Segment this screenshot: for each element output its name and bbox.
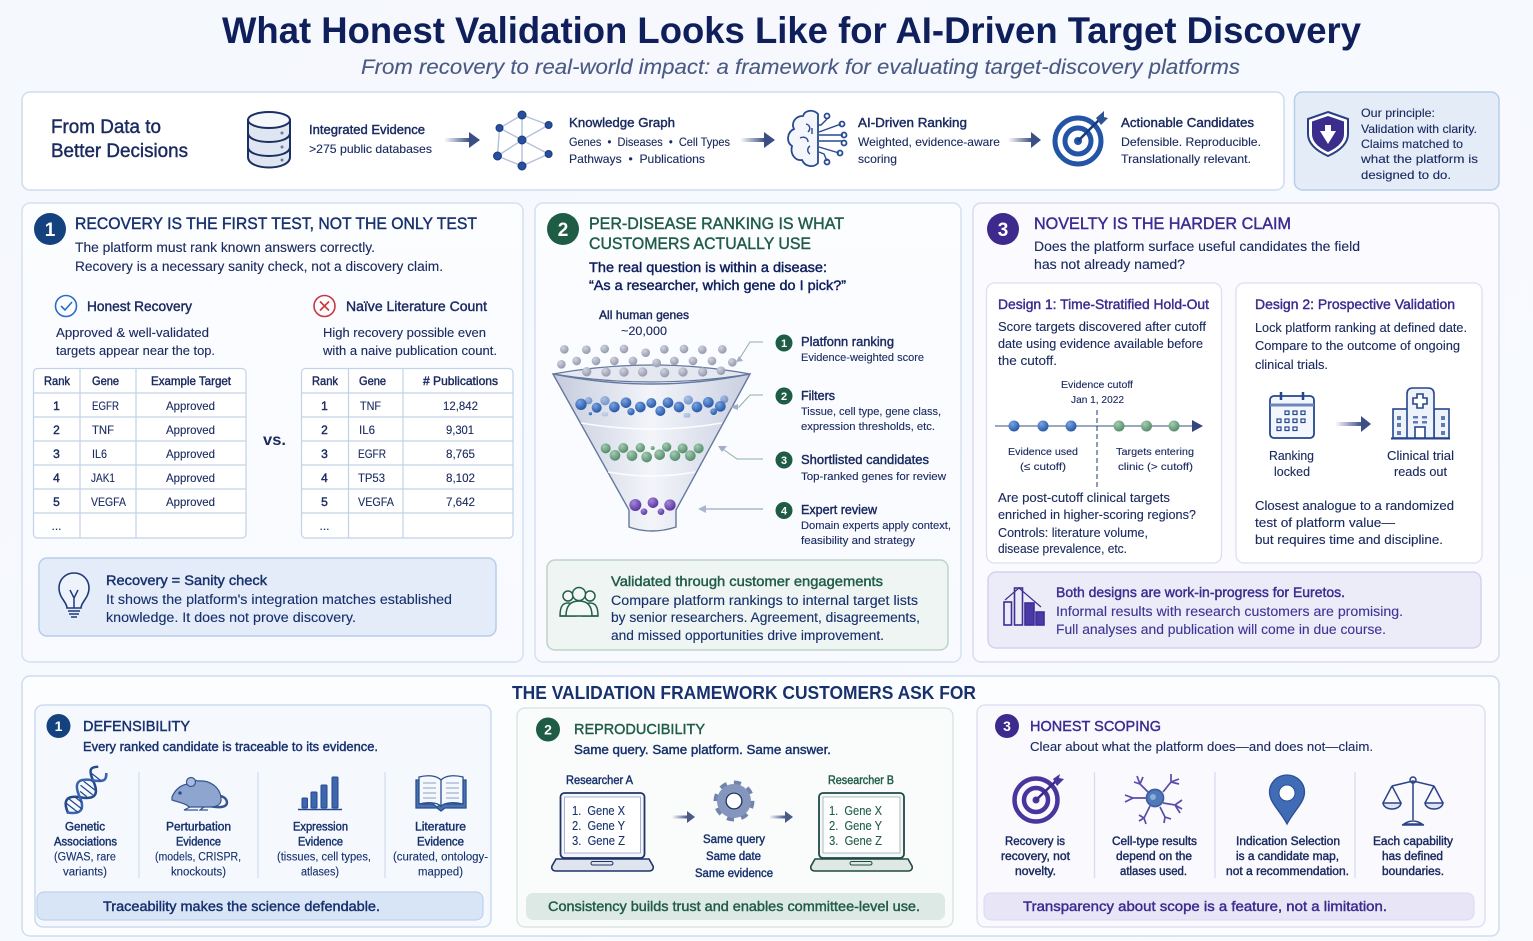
table: naive literature count: 8,102 [446,471,475,485]
label: vs: vs. [263,432,286,449]
title: What Honest Validation Looks Like for AI-Driven Target Discovery [222,10,1361,51]
arrow [740,132,775,148]
step 4: expert review [776,502,951,547]
table: naive literature count: ... [319,519,330,533]
table: honest recovery: EGFR [92,399,119,413]
labels: evidence types: Perturbation [166,822,231,834]
text: design 1 question: Controls: literature volume, [998,526,1148,540]
table: honest recovery: IL6 [92,447,107,461]
text: customer engagements: by senior researchers. Agreement, disagreements, [611,610,920,625]
arrow [769,811,793,823]
text: novelty intro: Does the platform surface useful candidates the field [1034,239,1360,254]
timeline [995,379,1203,488]
text: recovery intro: Recovery is a necessary sanity check, not a discovery claim. [75,259,443,274]
labels: evidence types: mapped) [418,866,463,878]
icon: mouse [172,778,227,810]
step 4: expert review: Expert review [801,502,878,517]
arrow [672,811,695,823]
footer banner [37,892,483,920]
table: honest recovery: Approved [166,447,215,461]
text: honest recovery: targets appear near the top. [56,343,215,358]
text: customer engagements [611,573,920,643]
text: design 2 description [1255,321,1467,372]
table: honest recovery: Approved [166,399,215,413]
labels: evidence types: variants) [63,866,107,878]
heading: defensibility: DEFENSIBILITY [83,718,190,735]
text: design 1 description: date using evidence available before [998,337,1203,351]
heading: defensibility: Every ranked candidate is traceable to its evidence. [83,739,378,754]
text: design 1 question: disease prevalence, etc. [998,542,1127,556]
funnel dots: filtered [575,395,728,418]
funnel dots: expert review [629,497,676,515]
table: honest recovery: Example Target [151,374,232,388]
footer banner [984,893,1474,920]
icon: target purple [1014,774,1064,822]
text: design 1 description: Score targets discovered after cutoff [998,320,1207,334]
icon: database [248,112,290,168]
table: honest recovery [34,368,246,538]
text: design 1 description [998,320,1207,368]
heading: reproducibility [574,721,831,757]
footer banner: Consistency builds trust and enables committee-level use. [548,898,920,914]
labels: evidence types: Evidence [176,836,221,848]
badge 2 [536,718,560,742]
text: design 2 description: Lock platform ranking at defined date. [1255,321,1467,335]
table: naive literature count: # Publications [423,374,498,388]
icon: gear [716,784,752,818]
heading: from data to better decisions [51,117,188,162]
text: customer engagements: Compare platform rankings to internal target lists [611,593,918,608]
text: our principle: what the platform is [1360,152,1478,166]
callout: customer engagements [547,560,948,650]
timeline: Jan 1, 2022 [1071,394,1124,406]
text: sanity check: It shows the platform's integration matches established [106,592,452,607]
table: honest recovery: ... [51,519,62,533]
timeline: Targets entering [1116,446,1194,458]
icon: hospital [1391,388,1450,438]
card: design 1 [986,283,1222,563]
labels: evidence types: (tissues, cell types, [277,852,371,864]
labels: scoping statements [1001,836,1453,878]
text: design 2 description: clinical trials. [1255,358,1328,372]
table: honest recovery: 3 [53,447,60,461]
text: design 2 conclusion [1255,499,1454,547]
panel: novelty [973,203,1499,662]
laptop: researcher A: 1. Gene X [572,804,626,818]
labels: scoping statements: not a recommendation. [1226,866,1349,878]
heading: per-disease ranking: PER-DISEASE RANKING IS WHAT [589,214,844,233]
table: naive literature count: 4 [321,471,328,485]
text: design 1 question: enriched in higher-scoring regions? [998,508,1196,522]
step 3: shortlisted candidates: Shortlisted candidates [801,452,929,467]
table: naive literature count: 2 [321,423,328,437]
step 1: platform ranking: Evidence-weighted score [801,352,924,364]
heading: per-disease ranking: CUSTOMERS ACTUALLY USE [589,234,811,253]
text: customer engagements: and missed opportunities drive improvement. [611,628,884,643]
table: naive literature count: IL6 [359,423,375,437]
text: customer engagements: Validated through customer engagements [611,573,883,589]
laptop: researcher B: Researcher B [828,775,894,787]
badge 1: 1 [55,718,63,734]
step 1: platform ranking [776,334,924,364]
text: real question [589,260,846,293]
table: naive literature count: EGFR [358,447,386,461]
label: all human genes: All human genes [599,308,689,322]
text: actionable candidates: Translationally relevant. [1121,152,1251,166]
laptop: researcher A [552,775,653,871]
heading: validation framework: THE VALIDATION FRAMEWORK CUSTOMERS ASK FOR [512,683,976,703]
labels: ranking locked, clinical trial [1269,449,1454,479]
step 1: platform ranking: Platfonn ranking [801,334,894,349]
funnel chart [553,345,750,531]
text: knowledge graph: Knowledge Graph [569,115,675,130]
table: naive literature count [302,368,513,538]
text: naive count: High recovery possible even [323,325,486,340]
heading: design 2: Design 2: Prospective Validation [1255,296,1455,312]
icon: shield [1308,112,1348,156]
laptop: researcher B: 3. Gene Z [829,834,882,848]
icon: people [560,588,598,616]
panel: our principle [1294,92,1499,190]
panel: recovery [22,203,523,662]
heading: reproducibility: Same query. Same platform. Same answer. [574,742,831,757]
text: actionable candidates [1121,115,1261,166]
table: naive literature count: 1 [321,399,328,413]
footer banner: Traceability makes the science defendable. [103,898,380,914]
text: design 2 description: Compare to the outcome of ongoing [1255,339,1460,353]
text: same query date evidence: Same query [703,834,765,846]
icon: AI brain [788,111,846,166]
text: our principle: Validation with clarity. [1361,122,1477,136]
laptop: researcher A: Researcher A [566,775,633,787]
table: honest recovery: VEGFA [91,495,126,509]
text: sanity check: Recovery = Sanity check [106,572,268,588]
labels: evidence types: Literature [415,822,466,834]
heading: per-disease ranking [589,214,844,253]
text: design 2 conclusion: Closest analogue to a randomized [1255,499,1454,513]
text: naive count: with a naive publication count. [322,343,497,358]
icon: knowledge graph [494,111,552,170]
text: design 2 conclusion: test of platform value— [1255,516,1396,530]
table: honest recovery: Rank [44,374,71,388]
labels: evidence types: (GWAS, rare [54,852,116,864]
text: work in progress: Both designs are work-in-progress for Euretos. [1056,584,1345,600]
labels: evidence types: atlases) [301,866,339,878]
text: knowledge graph: Genes • Diseases • Cell Types [569,135,730,149]
labels: ranking locked, clinical trial: locked [1274,465,1310,479]
labels: scoping statements: Cell-type results [1112,836,1197,848]
step 4: expert review: Domain experts apply context, [801,520,951,532]
text: integrated evidence: Integrated Evidence [309,122,425,137]
text: our principle [1360,106,1478,182]
text: our principle: Claims matched to [1361,137,1463,151]
card: honest scoping [977,705,1485,927]
labels: scoping statements: Each capability [1373,836,1453,848]
table: honest recovery: 2 [53,423,60,437]
text: actionable candidates: Defensible. Reproducible. [1121,135,1261,149]
table: naive literature count: Gene [359,374,386,388]
step 2: filters [776,388,941,433]
labels: scoping statements: Recovery is [1005,836,1065,848]
table: naive literature count: Rank [312,374,339,388]
labels: scoping statements: boundaries. [1382,866,1444,878]
text: design 2 conclusion: but requires time and discipline. [1255,533,1443,547]
heading: design 1: Design 1: Time-Stratified Hold-Out [998,296,1209,312]
panel: per-disease ranking [535,203,961,662]
heading: novelty: NOVELTY IS THE HARDER CLAIM [1034,214,1291,233]
badge 3 [987,213,1019,245]
table: honest recovery: 4 [53,471,60,485]
table: honest recovery: Approved [166,423,215,437]
card: defensibility [35,705,491,927]
step 2: filters: expression thresholds, etc. [801,421,935,433]
icon: DNA [59,763,110,819]
table: honest recovery: Gene [92,374,119,388]
badge 3: 3 [998,220,1008,241]
label: all human genes: ~20,000 [621,324,667,338]
text: AI-driven ranking [858,115,1000,166]
text: AI-driven ranking: scoring [858,152,897,166]
heading: honest scoping: HONEST SCOPING [1030,718,1161,735]
labels: scoping statements: atlases used. [1120,866,1187,878]
labels: ranking locked, clinical trial: Ranking [1269,449,1314,463]
arrow [1008,132,1041,148]
text: same query date evidence: Same date [706,851,761,863]
table: honest recovery: 5 [53,495,60,509]
table: naive literature count: TNF [360,399,381,413]
table: honest recovery: TNF [92,423,114,437]
heading: from data to better decisions: From Data to [51,117,161,138]
badge 1: 1 [45,220,56,241]
footer banner [526,893,945,920]
laptop: researcher A: 2. Gene Y [572,819,626,833]
labels: evidence types: (curated, ontology- [393,852,488,864]
text: honest recovery [56,325,215,358]
icon: target [1055,111,1108,164]
text: design 1 question: Are post-cutoff clinical targets [998,491,1170,505]
labels: evidence types: Expression [293,822,348,834]
icon: neuron [1125,774,1182,824]
labels: ranking locked, clinical trial: reads out [1394,465,1448,479]
callout: work in progress [988,572,1481,648]
icon: bar chart [1004,588,1044,625]
icon: balance scale [1383,777,1443,825]
labels: evidence types: Genetic [65,822,105,834]
text: integrated evidence [309,122,432,156]
text: novelty intro [1034,239,1360,272]
labels: ranking locked, clinical trial: Clinical trial [1387,449,1454,463]
text: actionable candidates: Actionable Candidates [1121,115,1255,130]
panel: validation framework [22,676,1499,936]
text: our principle: designed to do. [1361,168,1451,182]
callout: sanity check [39,558,496,636]
labels: scoping statements: has defined [1382,851,1443,863]
text: naive count [322,325,497,358]
text: our principle: Our principle: [1361,106,1435,120]
labels: evidence types [54,822,488,878]
text: design 1 question [998,491,1196,556]
arrow [444,132,480,148]
labels: evidence types: Evidence [417,836,464,848]
icon: check [56,296,76,316]
label: all human genes [599,308,689,338]
funnel dots: all genes [557,345,737,377]
icon: location pin [1270,775,1304,824]
badge 3 [995,714,1019,738]
badge 2: 2 [558,220,568,241]
timeline: Evidence cutoff [1061,379,1133,391]
text: work in progress [1056,584,1403,637]
badge 1 [34,213,66,245]
text: sanity check [106,572,452,625]
text: AI-driven ranking: AI-Driven Ranking [858,115,967,130]
text: same query date evidence: Same evidence [695,868,773,880]
funnel dots: shortlisted [601,442,704,462]
heading: honest recovery: Honest Recovery [87,298,192,314]
panel: from data to better decisions [22,92,1284,190]
text: work in progress: Informal results with research customers are promising. [1056,604,1403,619]
badge 3: 3 [1003,718,1011,734]
table: naive literature count: VEGFA [358,495,394,509]
table: naive literature count: 5 [321,495,328,509]
table: naive literature count: 8,765 [446,447,475,461]
badge 1 [46,714,70,738]
text: recovery intro [75,240,443,274]
heading: reproducibility: REPRODUCIBILITY [574,721,705,738]
table: honest recovery: 1 [53,399,60,413]
card: design 2 [1236,283,1482,563]
step 3: shortlisted candidates: Top-ranked genes for review [801,471,946,483]
text: knowledge graph: Pathways • Publications [569,152,705,166]
table: naive literature count: 12,842 [443,399,478,413]
timeline: Evidence used [1008,446,1078,458]
laptop: researcher B [811,775,912,871]
icon: book [416,776,466,811]
labels: evidence types: (models, CRISPR, [155,852,241,864]
labels: scoping statements: depend on the [1116,851,1192,863]
heading: from data to better decisions: Better Decisions [51,141,188,162]
badge 2: 2 [544,722,552,738]
table: naive literature count: 7,642 [446,495,475,509]
subtitle: From recovery to real-world impact: a framework for evaluating target-discovery platforms [361,56,1241,79]
arrow [1335,416,1371,432]
table: naive literature count: 3 [321,447,328,461]
step 2: filters: Filters [801,388,835,403]
table: naive literature count: TP53 [358,471,385,485]
text: novelty intro: has not already named? [1034,257,1185,272]
text: real question: The real question is within a disease: [589,260,827,275]
icon: cross [314,296,335,316]
labels: scoping statements: recovery, not [1001,851,1071,863]
labels: evidence types: Associations [54,836,117,848]
text: AI-driven ranking: Weighted, evidence-aware [858,135,1000,149]
labels: scoping statements: is a candidate map, [1236,851,1339,863]
card: reproducibility [517,708,953,927]
text: recovery intro: The platform must rank known answers correctly. [75,240,375,255]
badge 2 [547,213,579,245]
heading: honest scoping [1030,718,1373,754]
timeline: clinic (> cutoff) [1118,461,1193,473]
step 4: expert review: feasibility and strategy [801,535,916,547]
step 3: shortlisted candidates: 3 [781,455,787,467]
text: design 1 description: the cutoff. [998,354,1057,368]
labels: evidence types: Evidence [298,836,343,848]
table: honest recovery: Approved [166,471,215,485]
laptop: researcher A: 3. Gene Z [572,834,625,848]
labels: evidence types: knockouts) [171,866,226,878]
step 2: filters: Tissue, cell type, gene class, [801,406,941,418]
step 4: expert review: 4 [781,506,788,518]
icon: calendar [1270,392,1314,438]
step 3: shortlisted candidates [776,452,946,483]
labels: scoping statements: novelty. [1015,866,1056,878]
text: same query date evidence [695,834,773,880]
timeline: (≤ cutoff) [1020,461,1066,473]
laptop: researcher B: 1. Gene X [829,804,883,818]
step 2: filters: 2 [781,391,787,403]
text: honest recovery: Approved & well-validated [56,325,209,340]
text: real question: “As a researcher, which gene do I pick?” [589,278,846,293]
heading: honest scoping: Clear about what the platform does—and does not—claim. [1030,739,1373,754]
text: integrated evidence: >275 public databases [309,142,432,156]
leader lines [698,342,763,513]
table: naive literature count: 9,301 [446,423,474,437]
icon: bars [298,777,342,810]
footer banner: Transparency about scope is a feature, not a limitation. [1023,898,1387,914]
text: knowledge graph [569,115,730,166]
table: honest recovery: JAK1 [91,471,115,485]
heading: defensibility [83,718,378,754]
heading: recovery: RECOVERY IS THE FIRST TEST, NOT THE ONLY TEST [75,214,477,233]
laptop: researcher B: 2. Gene Y [829,819,883,833]
heading: naive literature count: Naïve Literature Count [346,298,487,314]
text: sanity check: knowledge. It does not prove discovery. [106,610,356,625]
text: work in progress: Full analyses and publication will come in due course. [1056,622,1386,637]
step 1: platform ranking: 1 [781,338,787,350]
icon: light bulb [59,573,89,617]
labels: scoping statements: Indication Selection [1236,836,1340,848]
table: honest recovery: Approved [166,495,215,509]
